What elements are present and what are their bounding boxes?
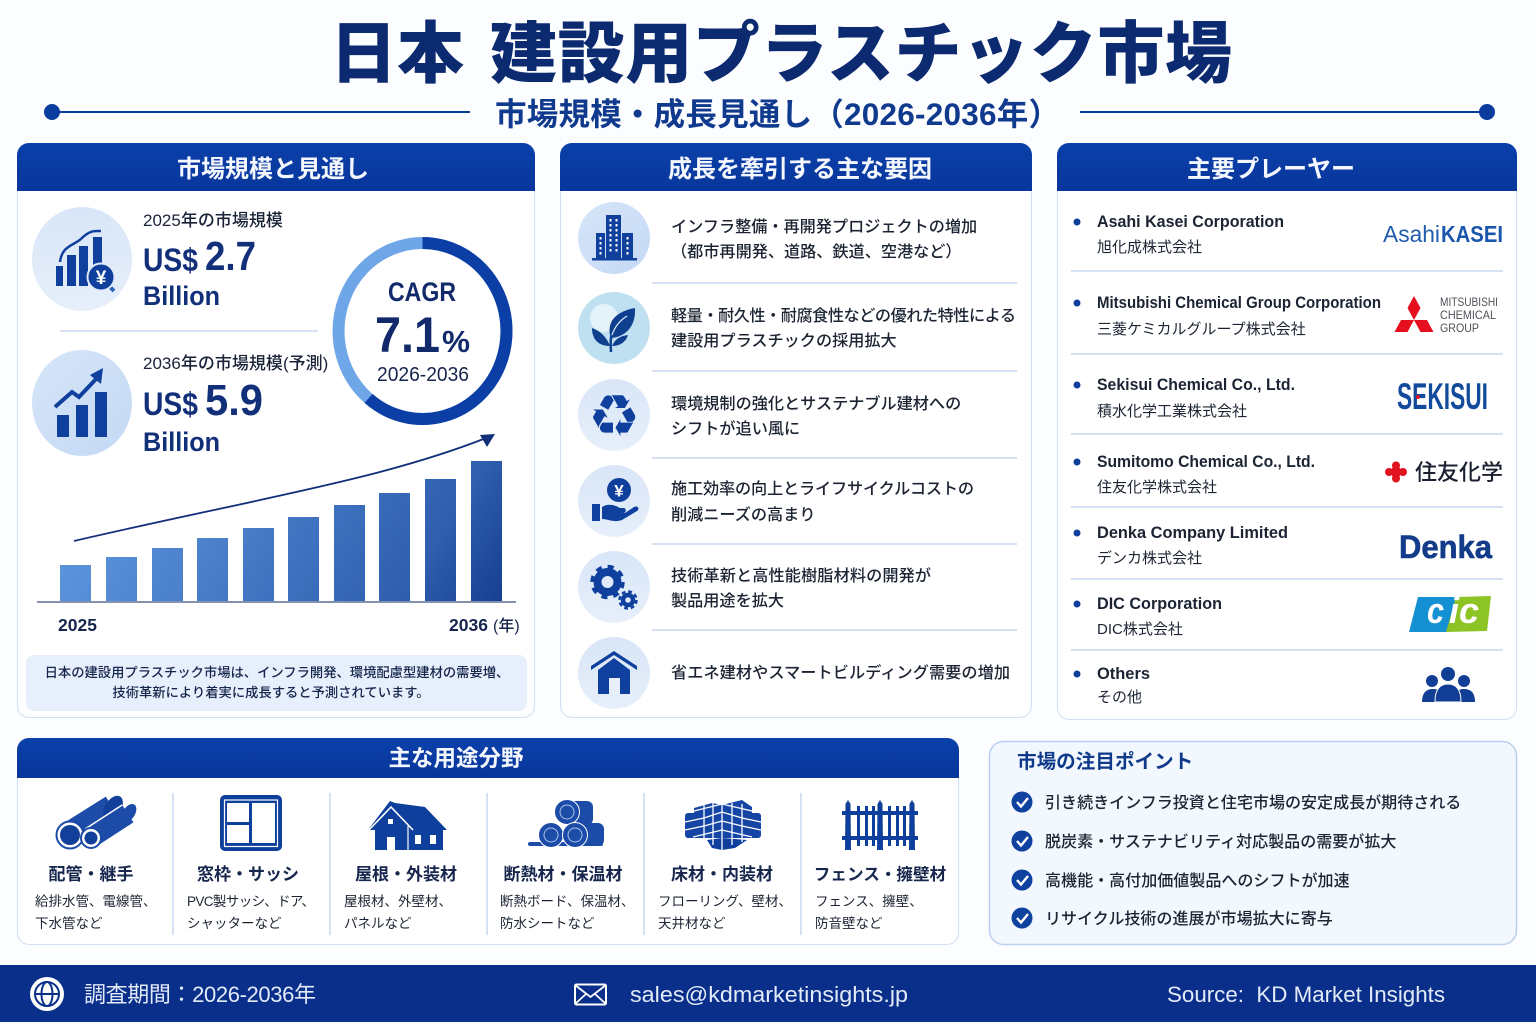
text: piping: [35, 864, 156, 931]
text: roofing: [344, 865, 457, 931]
text: 2025 market size: 2025年の市場規模: [143, 211, 283, 230]
text: fencing: [814, 865, 947, 931]
player: Denka: [1074, 524, 1492, 567]
chart: CAGR ring: CAGR: [388, 277, 456, 307]
text: 2025 market size: Billion: [143, 281, 220, 311]
title: 建設用プラスチック市場: [490, 17, 1232, 92]
player: Others: その他: [1097, 689, 1142, 706]
text: source: Source: KD Market Insights: [1167, 982, 1445, 1007]
icon: chart with yen magnifier: ¥: [96, 268, 107, 289]
text: flooring: 床材・内装材: [671, 865, 773, 884]
heading: growth drivers: 成長を牽引する主な要因: [668, 156, 932, 183]
icon: growth chart arrow: [32, 350, 132, 456]
chart: CAGR ring: 7.1: [375, 307, 440, 363]
icon: insulation rolls: [528, 800, 604, 848]
panel: key players: [1057, 143, 1517, 720]
icon: gears: [578, 551, 650, 623]
subtitle with rule lines: [44, 96, 1495, 132]
text: regulation: [671, 394, 961, 438]
text: energy saving: 省エネ建材やスマートビルディング需要の増加: [671, 663, 1010, 682]
text: infrastructure: [671, 218, 977, 261]
chart: CAGR ring: 2026-2036: [377, 364, 469, 386]
text: window sash: PVC製サッシ、ドア、: [187, 894, 315, 909]
callout: market summary: 技術革新により着実に成長すると予測されています。: [112, 684, 430, 700]
text: window sash: 窓枠・サッシ: [197, 865, 299, 884]
text: flooring: [658, 865, 792, 931]
text: 2036 market size: Billion: [143, 427, 220, 457]
text: email: sales@kdmarketinsights.jp: [630, 982, 908, 1007]
text: 2025 market size: 2.7: [205, 233, 256, 279]
text: 2036 market size: US$: [143, 386, 198, 422]
text: window sash: [187, 865, 315, 931]
text: construction efficiency: 施工効率の向上とライフサイクルコストの: [671, 480, 974, 498]
heading: market highlights: 市場の注目ポイント: [1017, 751, 1193, 773]
icon: chart with yen magnifier: [32, 207, 132, 311]
text: survey period: 調査期間：2026-2036年: [84, 982, 316, 1007]
player: Asahi Kasei: 旭化成株式会社: [1097, 239, 1202, 256]
player: Mitsubishi Chemical: CHEMICAL: [1440, 308, 1496, 322]
text: window sash: シャッターなど: [187, 916, 282, 931]
text: flooring: フローリング、壁材、: [658, 894, 792, 909]
panel: applications: [17, 738, 959, 944]
player: Denka: デンカ株式会社: [1097, 549, 1202, 567]
text: material properties: [671, 307, 1016, 350]
bar chart: market growth 2025-2036: 2025: [58, 615, 97, 635]
player: DIC: c: [1427, 590, 1444, 631]
icon: hand with yen coin: ¥: [614, 482, 624, 500]
heading: key players: 主要プレーヤー: [1187, 156, 1355, 183]
icon: window frame: [220, 795, 282, 851]
player: DIC: ic: [1449, 590, 1479, 631]
text: insulation: 防水シートなど: [500, 916, 595, 931]
player: Mitsubishi Chemical: GROUP: [1440, 321, 1479, 335]
player: Mitsubishi Chemical: MITSUBISHI: [1440, 295, 1498, 309]
chart: CAGR ring: [338, 243, 507, 419]
player: Sumitomo Chemical: Sumitomo Chemical Co., Ltd.: [1097, 453, 1315, 471]
text: fencing: フェンス・擁壁材: [814, 865, 947, 884]
player: Others: Others: [1097, 665, 1150, 683]
icon: house: [578, 637, 650, 709]
text: regulation: シフトが追い風に: [671, 419, 800, 438]
bar chart: market growth 2025-2036: [37, 434, 520, 635]
text: construction efficiency: 削減ニーズの高まり: [671, 505, 815, 524]
panel: growth drivers: [560, 143, 1032, 718]
text: technology innovation: 製品用途を拡大: [671, 592, 784, 610]
icon: globe: [30, 977, 64, 1011]
chart: CAGR ring: %: [442, 324, 470, 359]
player: DIC: DIC株式会社: [1097, 621, 1183, 638]
heading: applications: 主な用途分野: [388, 746, 524, 771]
player: DIC: [1074, 590, 1491, 638]
player: DIC: DIC Corporation: [1097, 595, 1222, 613]
text: insulation: 断熱ボード、保温材、: [500, 894, 634, 909]
text: technology innovation: 技術革新と高性能樹脂材料の開発が: [671, 566, 931, 585]
callout: market summary: 日本の建設用プラスチック市場は、インフラ開発、環境配慮型建材の需要増、: [45, 664, 509, 680]
icon: recycle: [578, 379, 650, 451]
text: 2036 market size: [143, 354, 328, 457]
icon: fence: [842, 800, 918, 850]
text: construction efficiency: [671, 480, 974, 524]
text: regulation: 環境規制の強化とサステナブル建材への: [671, 394, 961, 413]
highlight: decarbonization: 脱炭素・サステナビリティ対応製品の需要が拡大: [1045, 832, 1396, 851]
text: piping: 給排水管、電線管、: [35, 894, 156, 909]
text: 2025 market size: US$: [143, 242, 198, 278]
text: 2036 market size: 2036年の市場規模: [143, 354, 283, 373]
player: Sekisui Chemical: 積水化学工業株式会社: [1097, 403, 1247, 420]
player: Mitsubishi Chemical: [1074, 294, 1498, 338]
text: infrastructure: （都市再開発、道路、鉄道、空港など）: [671, 243, 962, 261]
player: Denka: Denka: [1399, 529, 1492, 565]
icon: pipes: [56, 792, 139, 848]
heading: market size: 市場規模と見通し: [177, 156, 369, 183]
highlight: high value products: 高機能・高付加価値製品へのシフトが加速: [1045, 871, 1350, 890]
text: insulation: 断熱材・保温材: [504, 865, 622, 884]
player: Asahi Kasei: Asahi: [1383, 221, 1440, 247]
subtitle with rule lines: 市場規模・成長見通し（2026-2036年）: [495, 96, 1060, 132]
text: technology innovation: [671, 566, 931, 610]
icon: envelope: [575, 984, 606, 1004]
text: flooring: 天井材など: [658, 916, 726, 931]
text: 2036 market size: (予測): [283, 354, 328, 373]
footer bar: [0, 965, 1536, 1022]
text: fencing: 防音壁など: [815, 915, 883, 931]
player: Mitsubishi Chemical: Mitsubishi Chemical Group Corporation: [1097, 294, 1381, 312]
bar chart: market growth 2025-2036: (年): [493, 617, 520, 635]
icon: recycle: ♻: [588, 382, 640, 450]
highlight: recycling: リサイクル技術の進展が市場拡大に寄与: [1045, 909, 1333, 928]
text: material properties: 軽量・耐久性・耐腐食性などの優れた特性による: [671, 307, 1016, 325]
text: infrastructure: インフラ整備・再開発プロジェクトの増加: [671, 218, 977, 236]
player: Sekisui Chemical: Sekisui Chemical Co., Ltd.: [1097, 376, 1295, 394]
text: roofing: パネルなど: [344, 916, 412, 931]
player: Sekisui Chemical: [1074, 376, 1488, 420]
panel: market highlights: [990, 742, 1516, 944]
panel: market size and forecast: [17, 143, 535, 718]
text: roofing: 屋根・外装材: [355, 865, 457, 884]
icon: house with roof: [368, 801, 447, 850]
text: insulation: [500, 865, 634, 931]
text: 2036 market size: 5.9: [205, 376, 263, 425]
callout: market summary: [26, 655, 527, 711]
icon: buildings: [578, 202, 650, 274]
player: Asahi Kasei: Asahi Kasei Corporation: [1097, 213, 1284, 231]
player: Denka: Denka Company Limited: [1097, 524, 1288, 542]
highlight: infrastructure investment: 引き続きインフラ投資と住宅市場の安定成長が期待される: [1045, 793, 1461, 812]
title: 日本: [330, 17, 464, 92]
player: Sumitomo Chemical: [1074, 453, 1503, 496]
text: piping: 配管・継手: [48, 864, 134, 884]
text: material properties: 建設用プラスチックの採用拡大: [671, 332, 897, 350]
player: Asahi Kasei: [1074, 213, 1503, 256]
player: Others: [1074, 665, 1475, 706]
player: Asahi Kasei: KASEI: [1441, 221, 1503, 247]
icon: flooring panels: [685, 800, 761, 850]
player: Mitsubishi Chemical: 三菱ケミカルグループ株式会社: [1097, 321, 1306, 338]
text: 2025 market size: [143, 211, 283, 311]
player: Sumitomo Chemical: 住友化学株式会社: [1097, 479, 1217, 496]
icon: hand with yen coin: [578, 465, 650, 537]
text: roofing: 屋根材、外壁材、: [344, 894, 452, 909]
icon: leaf: [578, 292, 650, 364]
bar chart: market growth 2025-2036: 2036: [449, 615, 488, 635]
player: Sumitomo Chemical: 住友化学: [1415, 460, 1503, 485]
text: fencing: フェンス、擁壁、: [815, 893, 923, 909]
text: piping: 下水管など: [35, 916, 103, 931]
